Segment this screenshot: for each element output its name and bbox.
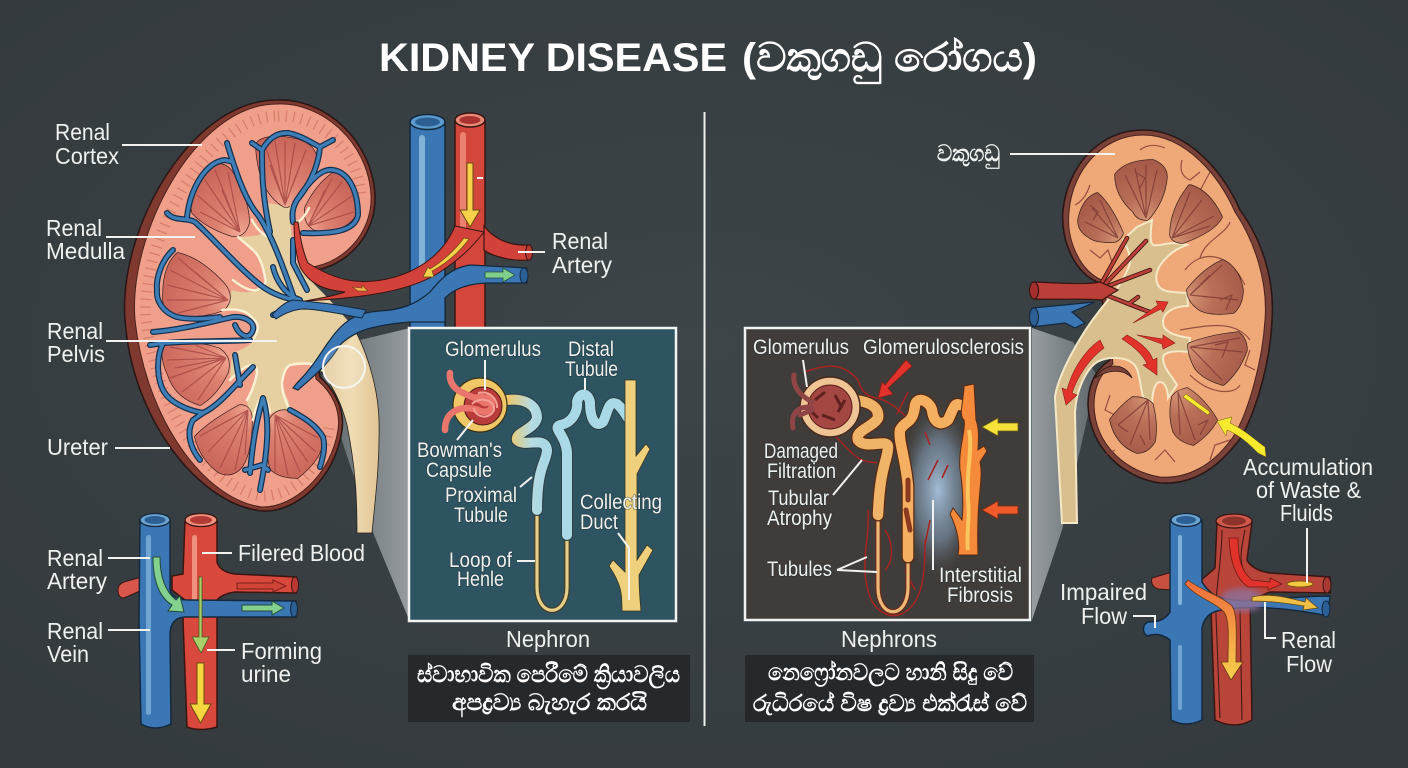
inset labels [417,338,662,591]
pelvis [225,203,358,420]
labels: blood vessel diagram: Forming [241,638,322,664]
title: KIDNEY DISEASE [379,36,727,80]
labels: impaired flow diagram: Flow [1286,651,1332,677]
calyx cups [222,205,317,420]
label: Accumulation: of Waste & [1256,477,1361,503]
arrows [153,557,184,612]
Bowman's capsule and glomerulus [445,373,507,432]
zoom projection wedge [1032,328,1097,620]
renal vein [293,265,527,390]
label: Renal Pelvis [47,318,277,367]
labels: blood vessel diagram: Artery [47,568,107,594]
label: Renal Medulla: Renal [46,215,102,241]
inset labels: Henle [457,568,504,591]
title: (වකුගඩු රෝගය) [742,36,1037,84]
inset labels: Proximal [445,484,517,507]
label: Renal Artery (top) [477,178,612,278]
inset labels: Fibrosis [947,584,1013,607]
caption: healthy: අපද්‍රව්‍ය බැහැර කරයි [452,689,647,718]
kidney body [1063,130,1272,483]
zoom projection wedge [322,328,410,622]
renal artery with branches [1030,238,1150,312]
labels: impaired flow diagram: Renal [1281,627,1336,653]
inset labels: Glomerulosclerosis [863,336,1024,359]
inset labels: Interstitial [939,564,1022,587]
inset labels [753,336,1024,607]
caption: damaged: නෙෆ්‍රෝනවලට හානි සිදු වේ [768,659,1013,687]
renal vein [1032,302,1095,328]
label: Accumulation [1243,454,1373,526]
kidney body [125,100,375,511]
inset labels: Atrophy [767,507,832,530]
magnifier circle [323,346,365,388]
inset labels: Distal [568,338,614,361]
diagram: impaired blood vessels [1143,514,1331,725]
panel: diseased kidney [1030,130,1272,620]
label: Renal Pelvis: Pelvis [47,341,105,367]
arrows [1229,538,1282,590]
inset labels: Capsule [426,459,492,482]
interstitial fibrosis cloud [900,405,976,575]
title [379,36,1037,84]
main vessels: vena cava and aorta [272,113,532,390]
label: Renal Artery (top): Renal [552,228,608,254]
inset labels: Duct [580,511,618,534]
pelvis and ureter [1055,220,1190,523]
inset warning arrows [878,360,1018,519]
waste accumulation arrows [1183,394,1266,457]
ureter [310,322,379,533]
veins in kidney [150,133,358,490]
renal artery [294,222,484,301]
caption: damaged: රුධිරයේ විෂ ද්‍රව්‍ය එක්රැස් වේ [753,690,1027,716]
labels: blood vessel diagram [47,540,365,687]
inset labels: Tubules [767,558,832,581]
damaged tubule [848,400,960,612]
labels: blood vessel diagram: Vein [47,641,89,667]
labels: impaired flow diagram: Impaired [1060,579,1147,605]
label: Sinhala kidney: වකුගඩු [937,140,1000,169]
inset labels: Glomerulus [445,338,541,361]
inset leader lines [457,360,629,600]
labels: blood vessel diagram: Renal [47,618,103,644]
inset labels: Bowman's [417,439,502,462]
inset labels: Damaged [764,440,838,463]
panel: healthy kidney [125,100,533,622]
labels: impaired flow diagram: Flow [1081,603,1127,629]
caption: healthy [408,655,690,722]
labels: blood vessel diagram: urine [241,661,291,687]
inset labels: Tubule [565,358,618,381]
label: Renal Artery (top): Artery [552,252,612,278]
inset labels: Filtration [767,460,836,483]
diseased pyramids [1080,162,1245,451]
caption: healthy: ස්වාභාවික පෙරීමේ ක්‍රියාවලිය [417,660,680,690]
labels: blood vessel diagram: Filered Blood [238,540,365,566]
label: Renal Medulla: Medulla [46,238,125,264]
lower hilum fold [1095,366,1132,378]
inset labels: Collecting [580,491,662,514]
label: Renal Cortex: Cortex [55,143,119,169]
caption: damaged [745,655,1034,722]
panel: healthy nephron inset [409,328,676,621]
label: Renal Cortex [55,119,202,169]
impaired zone smudge [1220,588,1264,612]
inset labels: Glomerulus [753,336,849,359]
panel: damaged nephron inset [745,328,1030,620]
inset labels: Tubular [768,487,829,510]
labels: blood vessel diagram: Renal [47,545,103,571]
damaged collecting duct [950,384,987,555]
medullary pyramids [164,139,356,476]
diseased glomerulus [792,375,860,437]
heading: Nephron: Nephron [506,626,590,652]
diagram: healthy blood vessels [118,514,298,730]
flow arrows [460,163,480,227]
label: Accumulation: Accumulation [1243,454,1373,480]
inset labels: Loop of [449,549,512,572]
nephron tubule [507,394,628,610]
label: Renal Pelvis: Renal [47,318,103,344]
red damaged capillaries [805,366,948,616]
label: Accumulation: Fluids [1280,500,1333,526]
labels: impaired flow diagram [1060,528,1336,677]
inset labels: Tubule [454,504,508,527]
inset leader lines [803,360,933,572]
collecting duct [609,380,653,611]
red backflow arrows [1062,301,1175,405]
label: Ureter [47,434,170,460]
label: Renal Medulla [46,215,195,264]
divider line [704,112,706,726]
label: Renal Cortex: Renal [55,119,110,145]
label: Ureter: Ureter [47,434,108,460]
heading: Nephrons: Nephrons [841,626,937,652]
